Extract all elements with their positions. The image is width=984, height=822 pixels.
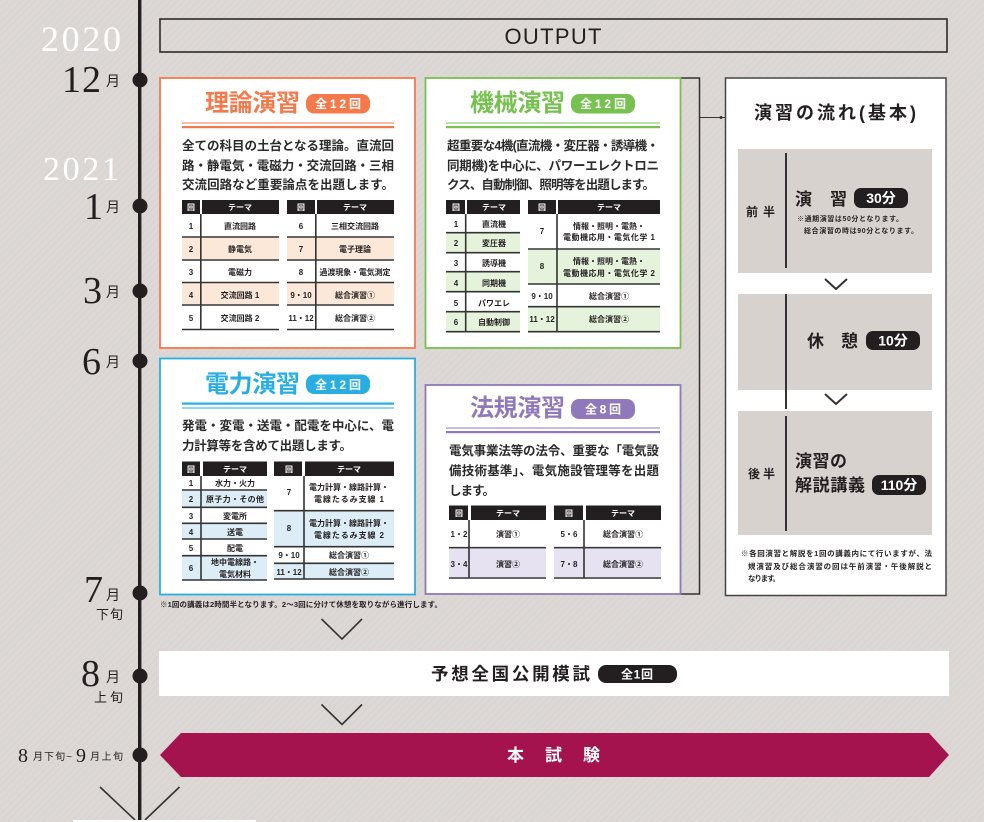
- badge: 12 sessions: [571, 94, 635, 114]
- arrow: to final exam: [322, 704, 362, 724]
- table: machinery right: 回: [538, 203, 546, 212]
- table: regulations left: 1・2: [451, 530, 468, 539]
- table: theory left: 1: [189, 222, 194, 231]
- milestone: late July: [84, 569, 148, 622]
- table: power right: [274, 462, 394, 579]
- output heading bar: [160, 19, 947, 52]
- description: 発電・変電・送電・配電を中心に、電: [182, 418, 394, 433]
- table: power left: テーマ: [223, 465, 247, 474]
- table: theory left: 3: [189, 268, 194, 277]
- table: machinery right: 情報・照明・電熱・: [573, 221, 645, 231]
- footnote: ※1回の講義は2時間半となります。2～3回に分けて休憩を取りながら進行します。: [160, 599, 442, 609]
- milestone: March: [83, 270, 148, 312]
- badge: 12 sessions: 全12回: [580, 96, 626, 111]
- table: regulations left: [449, 506, 546, 578]
- table: machinery left: 同期機: [482, 278, 506, 288]
- table: power left: 送電: [227, 527, 243, 537]
- table: theory right: 7: [299, 245, 304, 254]
- milestone: December: 月: [106, 73, 120, 89]
- table: power right: 総合演習①: [329, 550, 369, 560]
- chevron: [825, 279, 847, 289]
- table: regulations left: テーマ: [496, 509, 520, 518]
- table: power left: 変電所: [223, 511, 247, 521]
- milestone: early August: 月: [106, 669, 120, 685]
- table: power right: 電線たるみ支線 2: [314, 530, 385, 540]
- table: machinery left: テーマ: [482, 203, 506, 212]
- table: theory left: 電磁力: [228, 267, 252, 277]
- heading: machinery: 機械演習: [470, 90, 565, 117]
- table: power right: 回: [285, 465, 293, 474]
- table: machinery left: 自動制御: [478, 317, 510, 327]
- table: machinery right: 8: [540, 262, 545, 271]
- note: [741, 548, 932, 583]
- chevron: [825, 394, 847, 404]
- table: regulations right: テーマ: [611, 509, 635, 518]
- badge: 12 sessions: 全12回: [315, 377, 361, 392]
- table: theory right: 過渡現象・電気測定: [320, 267, 390, 277]
- step: exercise 30 min: [738, 149, 932, 273]
- table: theory right: [287, 200, 394, 330]
- table: power left: 1: [189, 479, 194, 488]
- step: lecture 110 min: 演習の: [795, 452, 847, 471]
- banner: final exam: [160, 733, 949, 777]
- step: exercise 30 min: 前半: [746, 204, 775, 219]
- table: theory left: 静電気: [228, 244, 252, 254]
- step: lecture 110 min: 110分: [881, 477, 917, 493]
- badge: 8 sessions: 全8回: [585, 402, 621, 416]
- table: theory left: テーマ: [228, 203, 252, 212]
- timeline: [18, 0, 148, 822]
- milestone: December: 12: [62, 59, 101, 101]
- bottom box edge: [73, 820, 256, 822]
- table: theory right: 回: [297, 203, 305, 212]
- table: machinery left: 変圧器: [482, 238, 506, 248]
- table: machinery left: 1: [454, 220, 459, 229]
- table: machinery left: 回: [452, 203, 460, 212]
- description: 備技術基準」、電気施設管理等を出題: [449, 463, 659, 478]
- milestone: exam period: 月下旬~: [33, 750, 72, 763]
- table: machinery left: 2: [454, 239, 459, 248]
- table: power left: 3: [189, 512, 194, 521]
- table: power left: 配電: [227, 544, 243, 553]
- banner: mock exam: 予想全国公開模試: [431, 664, 590, 684]
- milestone: early August: 8: [81, 653, 100, 695]
- table: power left: 水力・火力: [215, 478, 255, 488]
- badge: 12 sessions: 全12回: [315, 96, 361, 111]
- table: power right: 電力計算・線路計算・: [309, 482, 389, 492]
- table: machinery right: [528, 200, 660, 332]
- output heading bar: OUTPUT: [504, 24, 602, 49]
- table: power right: 8: [287, 524, 292, 533]
- description: [182, 418, 394, 453]
- table: theory right: 6: [299, 222, 304, 231]
- note: 規演習及び総合演習の回は午前演習・午後解説と: [748, 561, 932, 571]
- step: exercise 30 min: ※通期演習は50分となります。: [797, 214, 903, 223]
- milestone: January: [84, 186, 148, 228]
- milestone: January: 1: [84, 186, 103, 228]
- table: machinery left: 6: [454, 318, 459, 327]
- table: regulations left: 演習②: [496, 559, 520, 569]
- milestone: June: [82, 341, 148, 383]
- table: machinery right: 総合演習②: [589, 314, 629, 324]
- step: exercise 30 min: 30分: [866, 190, 896, 206]
- milestone: early August: 上旬: [94, 690, 123, 705]
- badge: 12 sessions: [306, 94, 370, 114]
- milestone: early August: [81, 653, 148, 705]
- step: lecture 110 min: 解説講義: [795, 476, 865, 495]
- table: power left: 2: [189, 495, 194, 504]
- milestone: exam period: 8: [18, 745, 28, 767]
- milestone: exam period: [18, 745, 148, 767]
- description: 交流回路など重要論点を出題します。: [182, 177, 394, 192]
- year 2021: 2021: [43, 151, 119, 188]
- table: theory left: 4: [189, 291, 194, 300]
- milestone: exam period: 9: [76, 745, 86, 767]
- table: theory right: 8: [299, 268, 304, 277]
- table: machinery right: 総合演習①: [589, 291, 629, 301]
- table: theory left: [182, 200, 279, 330]
- table: power left: 5: [189, 544, 194, 553]
- table: theory right: テーマ: [343, 203, 367, 212]
- panel: exercise flow: [726, 78, 946, 596]
- table: regulations left: 3・4: [451, 560, 468, 569]
- milestone: March: 3: [83, 270, 102, 312]
- panel: power exercises: [160, 358, 415, 594]
- table: theory left: 5: [189, 314, 194, 323]
- table: regulations right: 回: [565, 509, 573, 518]
- table: power right: テーマ: [337, 465, 361, 474]
- table: machinery left: 5: [454, 299, 459, 308]
- description: 超重要な4機(直流機・変圧器・誘導機・: [447, 138, 659, 153]
- milestone: March: 月: [106, 284, 120, 300]
- table: power left: 原子力・その他: [206, 494, 264, 504]
- badge: 12 sessions: [306, 374, 370, 394]
- table: machinery left: 直流機: [482, 219, 506, 229]
- step: lecture 110 min: 後半: [748, 466, 775, 481]
- arrow: to mock exam: [322, 619, 362, 639]
- milestone: January: 月: [106, 199, 120, 215]
- description: [447, 138, 659, 192]
- table: regulations right: 総合演習②: [603, 559, 643, 569]
- heading: theory: 理論演習: [205, 90, 300, 117]
- table: machinery left: パワエレ: [478, 299, 510, 308]
- table: machinery right: 11・12: [529, 315, 555, 324]
- description: 路・静電気・電磁力・交流回路・三相: [182, 158, 394, 173]
- description: 同期機)を中心に、パワーエレクトロニ: [447, 158, 659, 173]
- description: クス、自動制御、照明等を出題します。: [447, 177, 655, 192]
- step: exercise 30 min: 総合演習の時は90分となります。: [804, 226, 918, 235]
- heading: regulations: 法規演習: [470, 395, 565, 422]
- heading: power: 電力演習: [205, 371, 300, 398]
- banner: mock exam: 全1回: [621, 666, 653, 682]
- table: machinery left: [446, 200, 520, 332]
- bracket connector: [680, 78, 725, 594]
- table: power right: 11・12: [276, 568, 302, 577]
- table: power right: 9・10: [278, 551, 300, 560]
- table: theory left: 交流回路 1: [221, 290, 260, 300]
- step: break 10 min: 休 憩: [807, 331, 858, 351]
- table: power left: [182, 462, 267, 580]
- table: machinery left: 誘導機: [482, 258, 506, 268]
- banner: mock exam: [159, 651, 949, 696]
- table: power left: 地中電線路・: [211, 557, 259, 567]
- milestone: late July: 月: [106, 587, 120, 603]
- table: regulations right: 総合演習①: [603, 529, 643, 539]
- table: machinery left: 4: [454, 279, 459, 288]
- milestone: exam period: 月上旬: [90, 750, 123, 763]
- heading: flow: 演習の流れ(基本): [754, 103, 916, 123]
- table: power right: 電力計算・線路計算・: [309, 518, 389, 528]
- milestone: late July: 7: [84, 569, 103, 611]
- description: 力計算等を含めて出題します。: [182, 438, 352, 453]
- milestone: June: 6: [82, 341, 101, 383]
- panel: regulations exercises: [426, 385, 680, 594]
- table: regulations right: 7・8: [561, 560, 578, 569]
- table: regulations right: [554, 506, 661, 578]
- table: power right: 総合演習②: [329, 567, 369, 577]
- table: power left: 4: [189, 528, 194, 537]
- table: machinery right: 電動機応用・電気化学 1: [563, 232, 656, 242]
- table: machinery right: 9・10: [531, 292, 553, 301]
- description: 電気事業法等の法令、重要な「電気設: [449, 443, 659, 458]
- table: machinery right: 電動機応用・電気化学 2: [563, 268, 656, 278]
- table: theory left: 回: [187, 203, 195, 212]
- panel: theory exercises: [160, 78, 415, 348]
- badge: 8 sessions: [571, 399, 635, 419]
- table: regulations right: 5・6: [561, 530, 578, 539]
- year 2020: 2020: [41, 19, 121, 59]
- note: なります。: [748, 574, 780, 583]
- table: theory left: 2: [189, 245, 194, 254]
- banner: final exam: 本 試 験: [507, 746, 600, 765]
- table: theory right: 9・10: [290, 291, 312, 300]
- table: theory right: 総合演習②: [335, 313, 375, 323]
- panel: machinery exercises: [426, 78, 680, 348]
- table: theory right: 電子理論: [339, 244, 371, 254]
- table: power left: 6: [189, 564, 194, 573]
- table: machinery right: テーマ: [597, 203, 621, 212]
- note: ※各回演習と解説を1回の講義内にて行いますが、法: [741, 548, 932, 558]
- table: power right: 電線たるみ支線 1: [314, 494, 385, 504]
- table: theory left: 交流回路 2: [221, 313, 260, 323]
- table: power left: 回: [187, 465, 195, 474]
- table: theory right: 三相交流回路: [331, 221, 379, 231]
- table: power left: 電気材料: [219, 569, 251, 579]
- description: [182, 138, 394, 192]
- table: power right: 7: [287, 488, 292, 497]
- step: exercise 30 min: 演 習: [795, 190, 847, 209]
- milestone: late July: 下旬: [96, 607, 123, 622]
- table: machinery right: 情報・照明・電熱・: [573, 256, 645, 266]
- step: lecture 110 min: [738, 411, 932, 535]
- table: machinery left: 3: [454, 259, 459, 268]
- arrow: bottom chevron: [100, 787, 180, 820]
- description: [449, 443, 659, 498]
- description: します。: [449, 484, 495, 498]
- table: theory left: 直流回路: [224, 221, 256, 231]
- table: theory right: 総合演習①: [335, 290, 375, 300]
- table: regulations left: 回: [455, 509, 463, 518]
- step: break 10 min: [738, 294, 932, 409]
- table: machinery right: 7: [540, 227, 545, 236]
- step: break 10 min: 10分: [878, 332, 908, 348]
- milestone: June: 月: [106, 354, 120, 370]
- description: 全ての科目の土台となる理論。直流回: [182, 138, 394, 153]
- table: theory right: 11・12: [288, 314, 314, 323]
- table: regulations left: 演習①: [496, 529, 520, 539]
- milestone: December: [62, 59, 148, 101]
